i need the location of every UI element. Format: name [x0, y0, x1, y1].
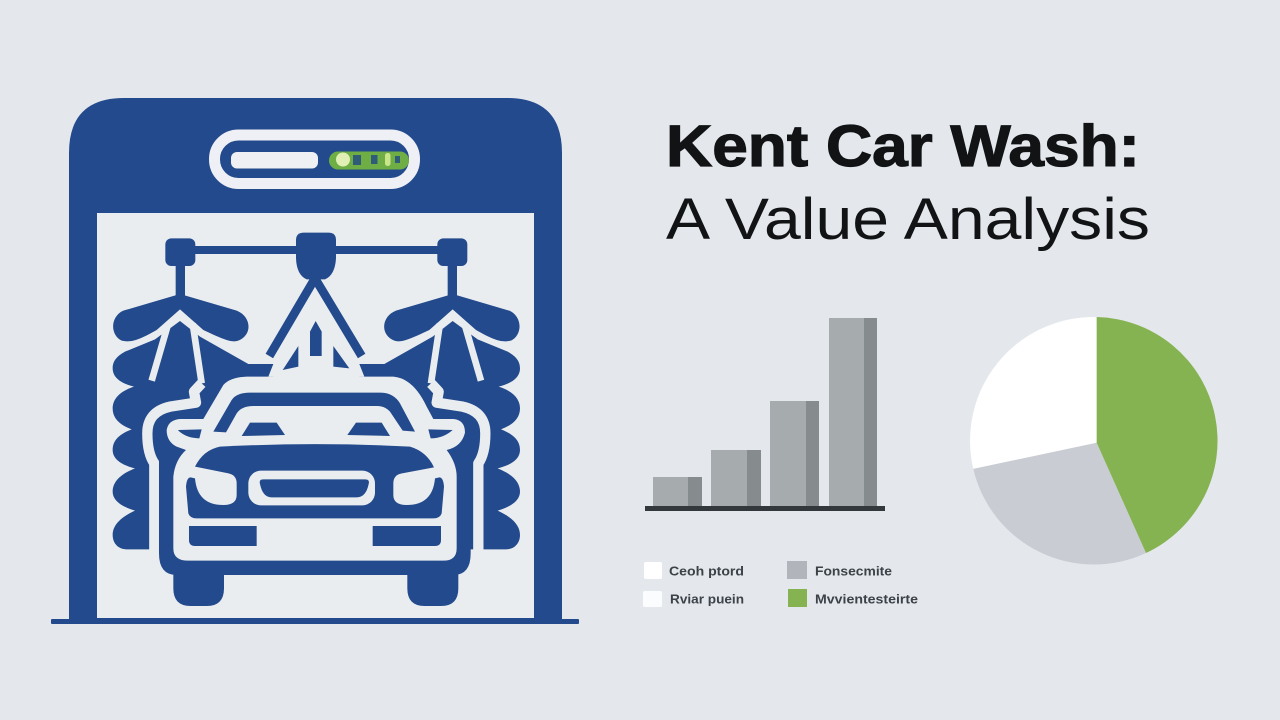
bar three	[770, 401, 819, 506]
gantry window	[97, 213, 534, 618]
gantry base line	[51, 619, 579, 624]
legend item: grey	[787, 561, 892, 579]
grey slice	[973, 443, 1146, 565]
car and brushes illustration	[113, 233, 520, 606]
bar two	[711, 450, 761, 506]
green slice	[1097, 317, 1218, 553]
car wheels	[173, 573, 458, 606]
title line one: Kent Car Wash:	[666, 114, 1140, 179]
pie chart	[970, 317, 1218, 565]
right brush	[359, 266, 520, 550]
overhead rail and hubs	[165, 233, 467, 279]
central spray frame	[269, 278, 362, 370]
bar one	[653, 477, 702, 506]
icon: car wash gantry	[51, 98, 579, 624]
legend item: green	[788, 589, 918, 607]
legend item: white one: Ceoh ptord	[669, 564, 744, 578]
legend item: grey: Fonsecmite	[815, 564, 892, 578]
car bumper lights	[189, 526, 441, 546]
car hood and front fascia	[186, 444, 444, 518]
bar four	[829, 318, 877, 506]
car roof and windows	[178, 393, 453, 438]
legend	[643, 561, 918, 607]
car grille	[248, 471, 375, 505]
title line two: A Value Analysis	[666, 187, 1150, 252]
white slice	[970, 317, 1097, 469]
gantry housing	[69, 98, 562, 620]
legend item: white one	[644, 562, 744, 579]
left brush	[113, 266, 273, 550]
chart baseline	[645, 506, 885, 511]
control panel	[214, 135, 414, 184]
title	[666, 114, 1150, 252]
legend item: white two	[643, 591, 744, 607]
car body	[167, 377, 465, 561]
car shell	[159, 460, 471, 575]
legend item: green: Mvvientesteirte	[815, 592, 918, 606]
bar chart	[645, 318, 885, 511]
legend item: white two: Rviar puein	[670, 592, 744, 606]
